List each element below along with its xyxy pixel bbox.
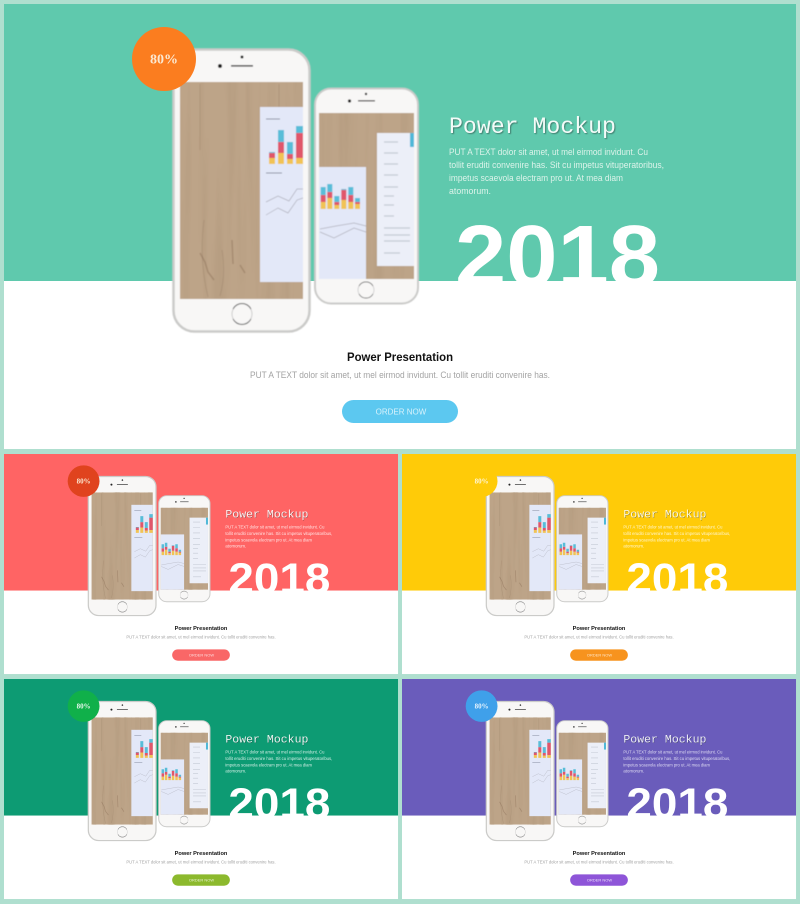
panel: purple slide bbox=[402, 679, 796, 899]
description text: atomorum. bbox=[623, 769, 644, 774]
description text bbox=[623, 750, 730, 774]
button: order now: ORDER NOW bbox=[189, 878, 214, 882]
button: order now: ORDER NOW bbox=[376, 408, 427, 416]
description text: PUT A TEXT dolor sit amet, ut mel eirmod invidunt. Cu bbox=[225, 750, 325, 754]
subtitle text: PUT A TEXT dolor sit amet, ut mel eirmod invidunt. Cu tollit eruditi convenire has. bbox=[126, 635, 276, 639]
description text: impetus scaevola electram pro ut. At mea diam bbox=[225, 537, 312, 542]
panel: green slide bbox=[4, 679, 398, 899]
description text bbox=[623, 525, 730, 549]
description text: tollit eruditi convenire has. Sit cu impetus vituperatoribus, bbox=[225, 531, 332, 536]
description text bbox=[449, 147, 664, 196]
big year 2018: 2018 bbox=[228, 555, 330, 603]
white lower band bbox=[4, 816, 398, 899]
panel: large teal slide bbox=[4, 4, 796, 449]
button: order now bbox=[570, 649, 628, 661]
description text: atomorum. bbox=[623, 544, 644, 549]
phone mockups bbox=[174, 50, 418, 332]
subtitle text: PUT A TEXT dolor sit amet, ut mel eirmod invidunt. Cu tollit eruditi convenire has. bbox=[250, 370, 550, 380]
description text: tollit eruditi convenire has. Sit cu impetus vituperatoribus, bbox=[225, 756, 332, 761]
description text bbox=[225, 750, 332, 774]
badge: 80%: 80% bbox=[150, 52, 178, 68]
phone mockups bbox=[486, 701, 608, 841]
heading: Power Mockup: Power Mockup bbox=[225, 509, 309, 522]
badge: 80% bbox=[466, 690, 498, 722]
badge: 80% bbox=[132, 27, 196, 91]
heading: Power Presentation: Power Presentation bbox=[175, 851, 228, 857]
badge: 80%: 80% bbox=[475, 703, 489, 710]
big year 2018: 2018 bbox=[228, 780, 330, 828]
description text: PUT A TEXT dolor sit amet, ut mel eirmod invidunt. Cu bbox=[623, 750, 723, 754]
white lower band bbox=[4, 591, 398, 674]
heading: Power Presentation: Power Presentation bbox=[573, 851, 626, 857]
description text: atomorum. bbox=[225, 769, 246, 774]
description text: PUT A TEXT dolor sit amet, ut mel eirmod invidunt. Cu bbox=[449, 147, 648, 157]
heading: Power Mockup: Power Mockup bbox=[623, 509, 707, 522]
phone mockups bbox=[88, 476, 210, 616]
white lower band bbox=[402, 816, 796, 899]
big year 2018: 2018 bbox=[626, 780, 728, 828]
badge: 80% bbox=[68, 690, 100, 722]
badge: 80% bbox=[466, 465, 498, 497]
subtitle text: PUT A TEXT dolor sit amet, ut mel eirmod invidunt. Cu tollit eruditi convenire has. bbox=[524, 635, 674, 639]
button: order now: ORDER NOW bbox=[587, 653, 612, 657]
heading: Power Mockup: Power Mockup bbox=[623, 734, 707, 747]
panel: yellow slide bbox=[402, 454, 796, 674]
description text: tollit eruditi convenire has. Sit cu impetus vituperatoribus, bbox=[623, 756, 730, 761]
panel: red slide bbox=[4, 454, 398, 674]
description text: impetus scaevola electram pro ut. At mea diam bbox=[225, 762, 312, 767]
description text: impetus scaevola electram pro ut. At mea diam bbox=[623, 537, 710, 542]
button: order now bbox=[172, 874, 230, 886]
heading: Power Mockup: Power Mockup bbox=[449, 114, 616, 140]
heading: Power Presentation: Power Presentation bbox=[347, 350, 453, 364]
description text: tollit eruditi convenire has. Sit cu impetus vituperatoribus, bbox=[449, 160, 664, 170]
description text: tollit eruditi convenire has. Sit cu impetus vituperatoribus, bbox=[623, 531, 730, 536]
button: order now bbox=[570, 874, 628, 886]
heading: Power Presentation: Power Presentation bbox=[573, 626, 626, 632]
description text: impetus scaevola electram pro ut. At mea diam bbox=[623, 762, 710, 767]
badge: 80%: 80% bbox=[77, 478, 91, 485]
button: order now bbox=[172, 649, 230, 661]
subtitle text: PUT A TEXT dolor sit amet, ut mel eirmod invidunt. Cu tollit eruditi convenire has. bbox=[126, 860, 276, 864]
description text: PUT A TEXT dolor sit amet, ut mel eirmod invidunt. Cu bbox=[225, 525, 325, 529]
phone mockups bbox=[88, 701, 210, 841]
badge: 80%: 80% bbox=[77, 703, 91, 710]
phone mockups bbox=[486, 476, 608, 616]
big year 2018: 2018 bbox=[455, 208, 660, 305]
heading: Power Presentation: Power Presentation bbox=[175, 626, 228, 632]
badge: 80% bbox=[68, 465, 100, 497]
description text: atomorum. bbox=[449, 186, 491, 196]
big year 2018: 2018 bbox=[626, 555, 728, 603]
description text: impetus scaevola electram pro ut. At mea diam bbox=[449, 173, 623, 183]
description text bbox=[225, 525, 332, 549]
heading: Power Mockup: Power Mockup bbox=[225, 734, 309, 747]
subtitle text: PUT A TEXT dolor sit amet, ut mel eirmod invidunt. Cu tollit eruditi convenire has. bbox=[524, 860, 674, 864]
button: order now: ORDER NOW bbox=[587, 878, 612, 882]
button: order now bbox=[342, 400, 458, 423]
white lower band bbox=[4, 281, 796, 449]
button: order now: ORDER NOW bbox=[189, 653, 214, 657]
badge: 80%: 80% bbox=[475, 478, 489, 485]
description text: PUT A TEXT dolor sit amet, ut mel eirmod invidunt. Cu bbox=[623, 525, 723, 529]
white lower band bbox=[402, 591, 796, 674]
description text: atomorum. bbox=[225, 544, 246, 549]
